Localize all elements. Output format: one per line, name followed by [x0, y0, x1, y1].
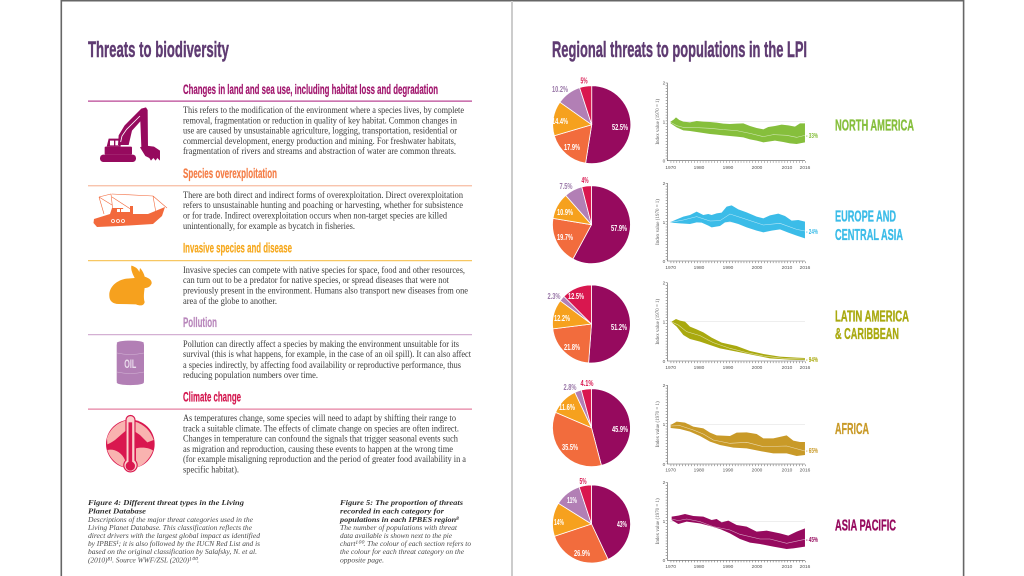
pie chart: africa: 35.5% — [562, 442, 578, 452]
icon: globe with thermometer — [106, 416, 155, 472]
line chart: asia pacific: 2010 — [782, 564, 793, 570]
line chart: africa: - 65% — [806, 446, 818, 455]
pie chart: africa — [552, 378, 630, 467]
line chart: africa — [656, 383, 818, 474]
caption: figure 5: the colour for each threat category on the — [340, 547, 465, 556]
line chart: north america: 2 — [663, 80, 666, 86]
line chart: africa: 1990 — [723, 468, 734, 474]
pie chart: latin america and caribbean: 21.8% — [564, 342, 580, 352]
text: climate change: (for example misaligning reproduction and the period of greater food availability in a — [183, 454, 466, 465]
line chart: north america: 1980 — [694, 165, 705, 171]
text: species overexploitation — [183, 190, 463, 232]
line chart: europe and central asia: 1990 — [723, 265, 734, 271]
panel: invasive species — [88, 240, 472, 307]
icon: fishing boat — [94, 194, 167, 227]
pie chart: asia pacific: 26.9% — [574, 548, 590, 558]
text: pollution — [183, 339, 471, 381]
text: pollution: survival (this is what happens, for example, in the case of an oil spill). It can also affect — [183, 349, 471, 360]
caption: figure 5: opposite page. — [340, 556, 384, 564]
region label: north america: NORTH AMERICA — [835, 118, 914, 135]
line chart: north america: 1 — [663, 120, 666, 126]
line chart: north america: - 33% — [806, 131, 818, 140]
text: pollution: Pollution can directly affect a species by making the environment unsuitable for its — [183, 339, 459, 350]
line chart: north america — [656, 80, 818, 171]
pie chart: europe and central asia — [552, 175, 630, 264]
line chart: asia pacific: 1 — [663, 519, 666, 525]
line chart: africa: 0 — [663, 462, 666, 468]
text: land and sea use — [183, 105, 464, 157]
icon: rabbit — [109, 266, 152, 305]
text: land and sea use: This refers to the modification of the environment where a species lives, by complete — [183, 105, 464, 116]
line chart: africa: 1970 — [665, 468, 676, 474]
panel: climate change — [88, 390, 472, 476]
line chart: asia pacific: 0 — [663, 558, 666, 564]
pie chart: north america — [552, 76, 631, 164]
line chart: asia pacific: 1990 — [723, 564, 734, 570]
line chart: latin america and caribbean: 2 — [663, 280, 666, 286]
line chart: africa: 1980 — [694, 468, 705, 474]
pie chart: latin america and caribbean: 12.2% — [554, 313, 570, 323]
line chart: europe and central asia — [656, 181, 818, 271]
caption: figure 4: Planet Database — [88, 506, 147, 516]
text: species overexploitation: refers to unsustainable hunting and poaching or harvesting, whether for subsistence — [183, 200, 463, 211]
line chart: africa: Index value (1970 = 1) — [656, 401, 661, 447]
line chart: north america: 1990 — [723, 165, 734, 171]
line chart: north america: Index value (1970 = 1) — [656, 98, 661, 145]
line chart: asia pacific: 2000 — [752, 564, 763, 570]
pie chart: latin america and caribbean: 51.2% — [611, 322, 627, 332]
caption: figure 4: Figure 4: Different threat types in the Living — [88, 498, 244, 507]
caption: figure 4: by IPBES¹; it is also followed by the IUCN Red List and is — [88, 539, 260, 548]
line chart: latin america and caribbean: 1980 — [694, 365, 705, 371]
pie chart: asia pacific: 11% — [567, 495, 577, 505]
line chart: latin america and caribbean — [656, 280, 818, 371]
pie chart: europe and central asia: 4% — [582, 175, 589, 185]
region label: africa: AFRICA — [835, 421, 869, 438]
line chart: africa: 2 — [663, 383, 666, 389]
pie chart: latin america and caribbean — [548, 285, 630, 363]
caption: figure 4: based on the original classification by Salafsky, N. et al. — [88, 547, 257, 556]
region label: latin america and caribbean: LATIN AMERICA — [835, 309, 909, 326]
text: climate change: As temperatures change, some species will need to adapt by shifting their range to — [183, 413, 456, 424]
text: climate change: specific habitat). — [183, 464, 239, 476]
caption: figure 5: chart¹⁰⁰. The colour of each section refers to — [340, 539, 471, 548]
line chart: asia pacific: 2 — [663, 480, 666, 486]
line chart: latin america and caribbean: 1990 — [723, 365, 734, 371]
panel: pollution — [88, 315, 472, 385]
region label: europe and central asia: CENTRAL ASIA — [835, 227, 903, 244]
pie chart: africa: 2.8% — [564, 382, 577, 392]
region label: asia pacific: ASIA PACIFIC — [835, 518, 896, 535]
line chart: north america: 2000 — [752, 165, 763, 171]
panel: species overexploitation — [88, 166, 472, 232]
pie chart: europe and central asia: 57.9% — [611, 223, 627, 233]
text: pollution: reducing population numbers over time. — [183, 371, 318, 381]
text: invasive species: Invasive species can compete with native species for space, food and other resources, — [183, 265, 465, 276]
line chart: asia pacific — [656, 480, 818, 570]
caption: figure 5: populations in each IPBES region⁸ — [339, 515, 459, 524]
line chart: europe and central asia: 1980 — [694, 265, 705, 271]
text: invasive species: area of the globe to another. — [183, 296, 277, 307]
heading: species overexploitation: Species overexploitation — [183, 166, 277, 181]
line chart: latin america and caribbean: Index value (1970 = 1) — [656, 298, 661, 345]
line chart: latin america and caribbean: 1970 — [665, 365, 676, 371]
pie chart: asia pacific: 14% — [554, 517, 564, 527]
title: regional threats: Regional threats to populations in the LPI — [552, 37, 807, 62]
line chart: north america: 0 — [663, 158, 666, 164]
line chart: asia pacific: 2016 — [800, 564, 811, 570]
region label: latin america and caribbean — [835, 309, 909, 343]
line chart: europe and central asia: 2016 — [800, 265, 811, 271]
pie chart: latin america and caribbean: 12.5% — [568, 291, 584, 301]
icon: oil barrel: OIL — [124, 357, 136, 371]
line chart: latin america and caribbean: 0 — [663, 359, 666, 365]
heading: invasive species: Invasive species and disease — [183, 240, 292, 256]
line chart: asia pacific: - 45% — [806, 535, 818, 544]
line chart: asia pacific: 1970 — [665, 564, 676, 570]
region label: europe and central asia — [835, 209, 903, 244]
text: invasive species: previously present in the environment. Humans also transport new diseases from one — [183, 286, 468, 296]
line chart: africa: 2000 — [752, 468, 763, 474]
line chart: europe and central asia: - 24% — [806, 227, 818, 236]
pie chart: africa: 11.6% — [559, 402, 575, 412]
text: invasive species — [183, 265, 468, 307]
pie chart: north america: 5% — [580, 76, 588, 86]
text: invasive species: can turn out to be a predator for native species, or spread diseases that were not — [183, 275, 449, 286]
line chart: north america: 2010 — [782, 165, 793, 171]
icon: excavator — [100, 107, 160, 162]
caption: figure 5: recorded in each category for — [340, 506, 445, 516]
line chart: europe and central asia: 1 — [663, 220, 666, 226]
caption: figure 4: Descriptions of the major threat categories used in the — [87, 515, 254, 524]
caption: figure 4: (2010)⁸¹. Source WWF/ZSL (2020)¹⁰⁰. — [88, 556, 199, 564]
pie chart: north america: 10.2% — [552, 84, 568, 94]
heading: climate change: Climate change — [183, 390, 241, 404]
line chart: latin america and caribbean: 1 — [663, 320, 666, 326]
line chart: africa: 2010 — [782, 468, 793, 474]
caption: figure 4: Living Planet Database. This classification reflects the — [87, 523, 253, 532]
line chart: europe and central asia: 2010 — [782, 265, 793, 271]
pie chart: africa: 45.9% — [612, 424, 628, 434]
pie chart: asia pacific: 5% — [580, 476, 587, 486]
line chart: latin america and caribbean: 2010 — [782, 365, 793, 371]
region label: latin america and caribbean: & CARIBBEAN — [835, 326, 899, 343]
pie chart: europe and central asia: 7.5% — [560, 181, 573, 191]
pie chart: latin america and caribbean: 2.3% — [548, 291, 561, 301]
pie chart: north america: 52.5% — [612, 122, 628, 132]
text: species overexploitation: unintentionally, for example as bycatch in fisheries. — [183, 221, 355, 232]
pie chart: asia pacific — [552, 476, 631, 563]
panel: land and sea use — [88, 82, 472, 162]
text: climate change: as migration and reproduction, causing these events to happen at the wrong time — [183, 445, 453, 455]
heading: pollution: Pollution — [183, 315, 217, 330]
title: threats to biodiversity: Threats to biodiversity — [88, 37, 229, 62]
text: pollution: a species indirectly, by affecting food availability or reproductive performance, thus — [183, 360, 461, 371]
caption: figure 5: data available is shown next to the pie — [340, 531, 453, 540]
text: species overexploitation: There are both direct and indirect forms of overexploitation. Direct overexploitation — [183, 190, 463, 201]
line chart: europe and central asia: 2000 — [752, 265, 763, 271]
line chart: latin america and caribbean: - 94% — [806, 355, 818, 364]
pie chart: north america: 17.9% — [564, 142, 580, 152]
icon: oil barrel — [117, 341, 144, 385]
pie chart: asia pacific: 43% — [617, 519, 627, 529]
text: land and sea use: removal, fragmentation or reduction in quality of key habitat. Common changes in — [183, 116, 457, 126]
pie chart: europe and central asia: 10.9% — [557, 207, 573, 217]
heading: land and sea use: Changes in land and sea use, including habitat loss and degradation — [183, 82, 438, 97]
line chart: africa: 1 — [663, 422, 666, 428]
line chart: north america: 1970 — [665, 165, 676, 171]
line chart: europe and central asia: Index value (1970 = 1) — [656, 199, 661, 245]
line chart: asia pacific: Index value (1970 = 1) — [656, 498, 661, 544]
region label: europe and central asia: EUROPE AND — [835, 209, 896, 226]
line chart: europe and central asia: 0 — [663, 259, 666, 265]
text: land and sea use: commercial development, energy production and mining. For freshwater habitats, — [183, 136, 456, 147]
caption: figure 4 — [87, 498, 260, 564]
pie chart: north america: 14.4% — [552, 116, 568, 126]
line chart: north america: 2016 — [800, 165, 811, 171]
text: climate change: track a suitable climate. The effects of climate change on species are often indirect. — [183, 424, 459, 434]
text: species overexploitation: or for trade. Indirect overexploitation occurs when non-target species are killed — [183, 210, 447, 222]
caption: figure 4: direct drivers with the largest global impact as identified — [88, 531, 260, 540]
caption: figure 5 — [339, 498, 471, 564]
line chart: africa: 2016 — [800, 468, 811, 474]
line chart: europe and central asia: 2 — [663, 181, 666, 187]
text: climate change — [183, 413, 466, 476]
line chart: asia pacific: 1980 — [694, 564, 705, 570]
text: land and sea use: fragmentation of rivers and streams and abstraction of water are common threats. — [183, 146, 456, 157]
line chart: latin america and caribbean: 2016 — [800, 365, 811, 371]
pie chart: africa: 4.1% — [580, 378, 594, 388]
pie chart: europe and central asia: 19.7% — [557, 232, 573, 242]
text: land and sea use: use are caused by unsustainable agriculture, logging, transportation, residential or — [183, 126, 458, 136]
caption: figure 5: The number of populations with threat — [340, 523, 458, 532]
text: climate change: Changes in temperature can confound the signals that trigger seasonal events such — [183, 434, 458, 444]
line chart: europe and central asia: 1970 — [665, 265, 676, 271]
caption: figure 5: Figure 5: The proportion of threats — [340, 498, 463, 507]
line chart: latin america and caribbean: 2000 — [752, 365, 763, 371]
